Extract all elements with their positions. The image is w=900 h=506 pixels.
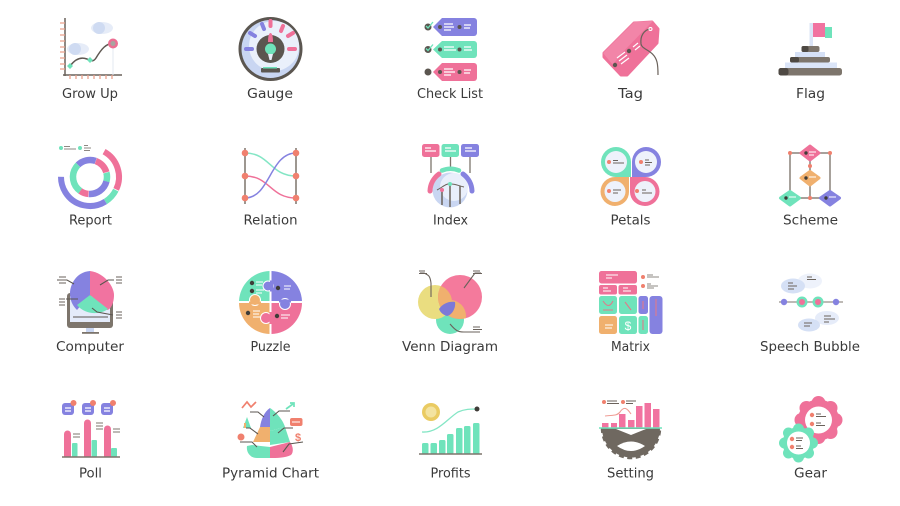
icon: flag on podium	[778, 23, 842, 76]
tile: Tag	[603, 21, 658, 102]
label: Venn Diagram: Venn Diagram	[402, 340, 498, 355]
tile: Check List	[417, 18, 483, 102]
tile: Scheme	[780, 146, 840, 228]
icon: donut report	[50, 137, 130, 217]
label: Speech Bubble: Speech Bubble	[760, 340, 860, 355]
icon: diamond scheme	[780, 146, 840, 205]
label: Grow Up: Grow Up	[62, 87, 118, 102]
icon: four petals	[600, 147, 661, 206]
tile: Report	[50, 137, 130, 228]
label: Index: Index	[433, 214, 468, 228]
label: Puzzle: Puzzle	[250, 340, 290, 355]
label: Profits: Profits	[430, 466, 471, 482]
tile: Gauge	[238, 17, 302, 102]
icon: pyramid chart: $	[295, 432, 301, 444]
label: Petals: Petals	[610, 214, 651, 228]
label: Gauge: Gauge	[247, 87, 293, 102]
tile: Venn Diagram	[402, 271, 498, 355]
tile: Pyramid Chart	[222, 402, 319, 482]
tile: Matrix	[599, 271, 662, 355]
label: Scheme: Scheme	[783, 214, 838, 228]
tile: Profits	[419, 403, 482, 482]
icon: poll bars	[62, 400, 120, 457]
label: Setting: Setting	[607, 466, 654, 482]
icon: growth line chart	[60, 18, 122, 79]
tile: Gear	[779, 396, 842, 482]
label: Relation: Relation	[244, 214, 298, 228]
tile: Grow Up	[60, 18, 122, 102]
tile: Setting	[599, 400, 662, 482]
tile: Index	[422, 144, 479, 228]
icon: two gears	[779, 396, 842, 462]
tile: Speech Bubble	[760, 274, 860, 355]
icon: half gear with bars	[599, 400, 662, 458]
label: Check List: Check List	[417, 87, 483, 102]
tile: Poll	[62, 400, 120, 482]
icon: computer with pie chart	[57, 271, 122, 334]
icon: price tag	[603, 21, 658, 75]
label: Pyramid Chart: Pyramid Chart	[222, 466, 319, 482]
label: Matrix: Matrix	[611, 340, 650, 355]
label: Report: Report	[69, 214, 112, 228]
icon: matrix grid: $	[625, 319, 632, 333]
icon: gauge dial	[238, 17, 302, 81]
icon: relation lines	[242, 148, 299, 204]
icon: check list tags	[424, 18, 477, 81]
label: Poll: Poll	[79, 466, 102, 482]
icon: index dial	[422, 144, 479, 208]
label: Computer: Computer	[56, 340, 125, 355]
icon: venn circles	[418, 271, 482, 334]
tile: Relation	[242, 148, 299, 228]
label: Gear: Gear	[794, 466, 828, 482]
icon: profit bars and coin	[419, 403, 482, 454]
icon: round puzzle	[239, 271, 302, 334]
icon: speech bubbles timeline	[779, 274, 843, 332]
tile: Computer	[56, 271, 125, 355]
label: Flag: Flag	[796, 87, 825, 102]
tile: Petals	[600, 147, 661, 228]
label: Tag: Tag	[617, 87, 643, 102]
tile: Puzzle	[239, 271, 302, 355]
tile: Flag	[778, 23, 842, 102]
